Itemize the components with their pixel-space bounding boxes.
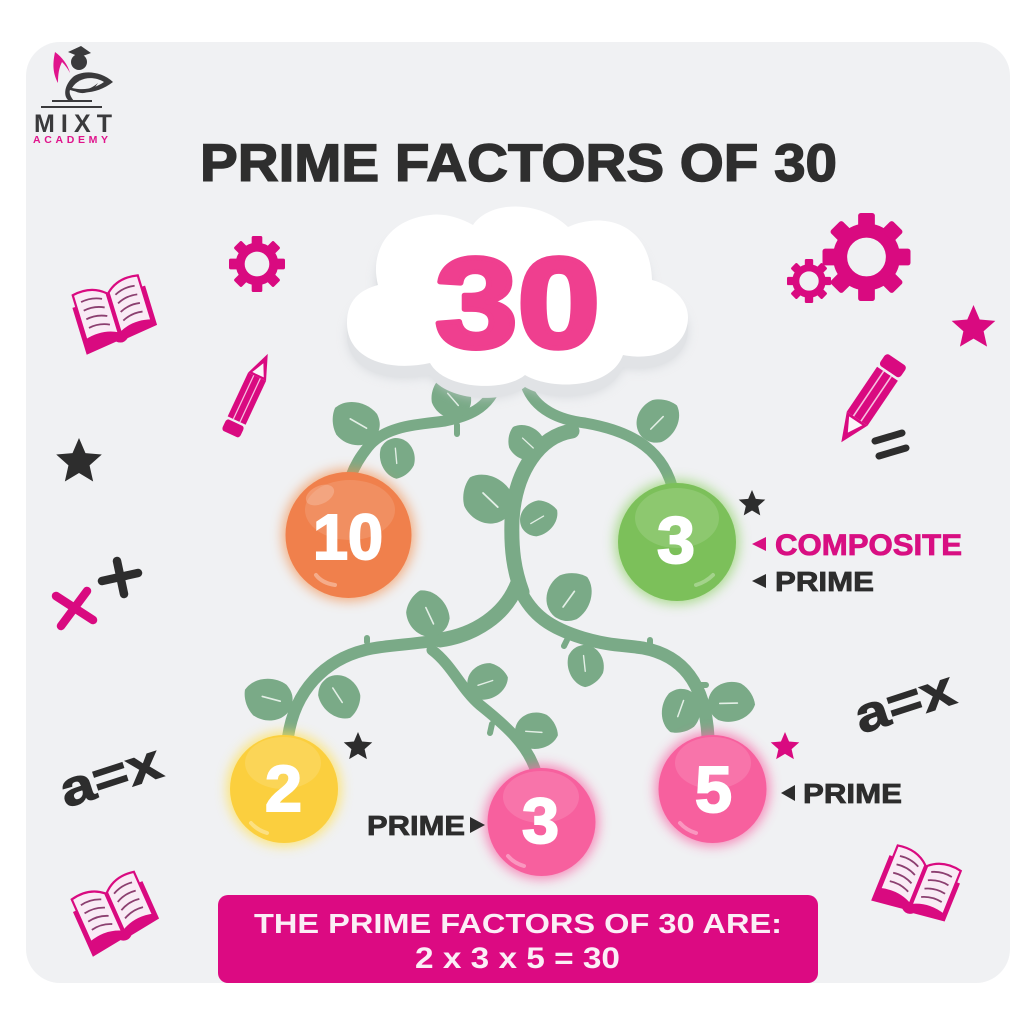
ball label: 10 [313,501,383,573]
cloud body [347,206,688,386]
icon: pencil right [831,353,907,449]
ball: 10 [282,469,414,601]
cloud depth [347,218,688,398]
cloud shadow [347,219,688,399]
logo subtitle: ACADEMY [33,134,108,146]
icon: book bottom right [871,843,965,929]
logo wordmark: MIXT [34,110,112,138]
ball label: 5 [695,753,732,826]
formula: a=x right: a=x [847,660,962,744]
icon: small star by 2 [344,732,372,759]
ball label: 3 [522,785,559,857]
icon: large gear right [822,213,910,301]
vine leaves [238,370,756,752]
icon: pink multiply sign [56,591,93,626]
formula: a=x left: a=x [52,733,169,818]
ball: yellow 2 [227,732,341,846]
icon: small pink star by 5 [771,732,799,759]
logo: Mixt Academy [33,46,113,146]
icon: equals sign [875,433,906,456]
sub branch to pink 3 [432,650,536,772]
banner line two: 2 x 3 x 5 = 30 [415,942,620,975]
tree vines [288,380,708,772]
ball label: 2 [265,752,302,825]
vine thorns [367,425,706,733]
icon: pencil left [221,350,277,438]
title: PRIME FACTORS OF 30 [200,134,837,193]
ball: pink 3 [484,765,598,879]
cloud number: 30 [435,232,600,375]
icon: black plus sign [102,561,138,594]
ball: green 3 [615,480,739,604]
right branch [520,590,708,737]
icon: small star by green 3 [739,490,765,515]
ball label: 3 [657,503,695,577]
label: prime, green 3: PRIME [775,566,874,597]
label: prime, pink 5: PRIME [803,778,902,809]
result banner [218,895,818,983]
label: prime, pink 3: PRIME [367,810,465,841]
left branch [440,585,517,640]
banner line one: THE PRIME FACTORS OF 30 ARE: [254,908,782,939]
label: composite: COMPOSITE [775,529,962,562]
icon: gear left [229,236,285,292]
icon: black star left [56,438,102,481]
vine to green 3 [526,385,672,486]
icon: pink star right [952,305,995,347]
icon: book top left [69,273,159,355]
icon: book bottom left [68,869,162,957]
vine to 10 [351,380,498,476]
central stem [512,431,572,592]
ball: pink 5 [656,732,770,846]
icon: small gear right [787,259,831,303]
cloud with number 30 [347,206,688,399]
